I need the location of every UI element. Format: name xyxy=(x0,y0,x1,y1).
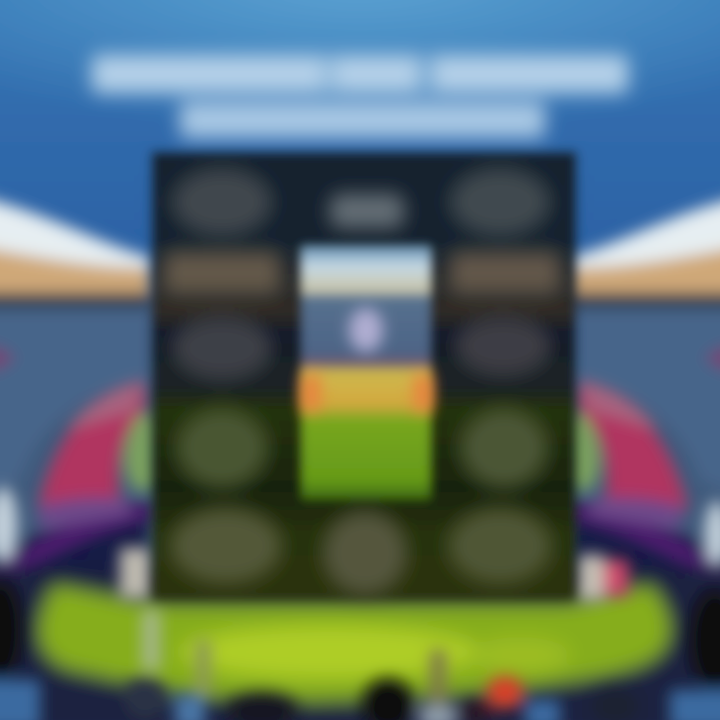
spectators in foreground xyxy=(0,548,720,720)
player glow xyxy=(349,308,383,352)
cards: grid of blurred info panels xyxy=(164,168,560,595)
left stands structure xyxy=(0,295,160,720)
card: top center xyxy=(330,194,404,228)
card: top left xyxy=(172,168,272,236)
pink seating: right xyxy=(570,380,720,600)
background: sky xyxy=(0,0,720,320)
corner shadows xyxy=(0,580,22,680)
pink seating: left xyxy=(0,380,155,600)
card: row four left xyxy=(176,408,268,488)
card: row two left xyxy=(164,252,280,294)
window highlights xyxy=(302,308,432,411)
right stands structure xyxy=(570,295,720,720)
card: bottom right xyxy=(448,508,552,584)
title line 2 xyxy=(180,102,545,138)
card: row three right xyxy=(455,316,551,376)
card: top right xyxy=(450,168,550,236)
stadium background: right stands xyxy=(570,195,720,720)
center window: stadium view xyxy=(301,246,431,500)
orange sides xyxy=(302,375,320,411)
card: bottom left xyxy=(170,508,282,584)
card: row four right xyxy=(460,408,548,488)
title line 1 xyxy=(92,55,628,93)
card: row two right xyxy=(450,252,560,294)
stadium background: left stands xyxy=(0,195,160,720)
pitch xyxy=(0,570,720,720)
title xyxy=(92,50,628,138)
card: bottom center xyxy=(323,511,407,595)
card: row three left xyxy=(172,316,272,380)
central dark panel xyxy=(152,152,576,600)
